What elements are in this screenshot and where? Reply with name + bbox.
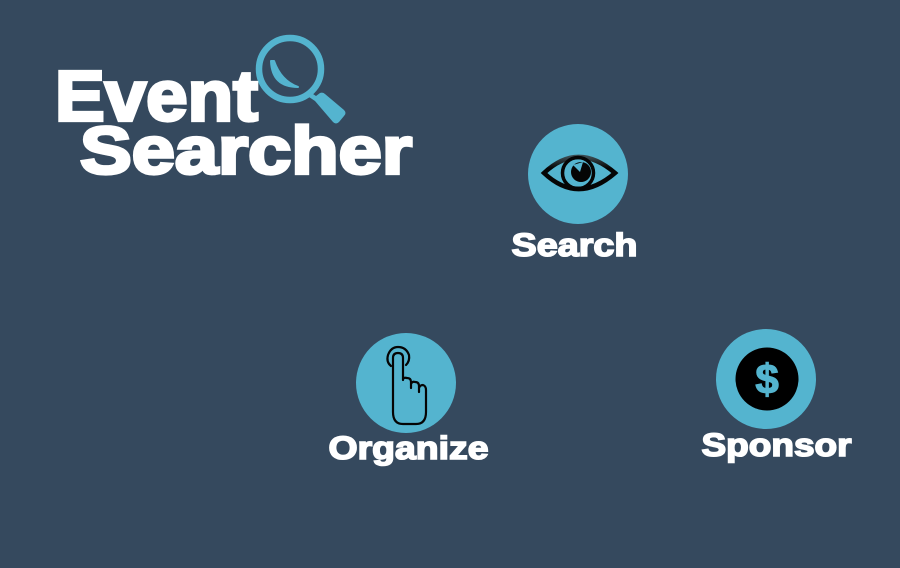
feature: Sponsor bbox=[702, 329, 852, 463]
label: Organize: Organize bbox=[328, 430, 488, 466]
label: Sponsor: Sponsor bbox=[702, 427, 852, 463]
label: Search: Search bbox=[512, 227, 638, 263]
icon: eye bbox=[528, 124, 628, 224]
feature: Organize bbox=[328, 333, 488, 466]
title: Searcher: Searcher bbox=[80, 114, 412, 188]
icon: magnifying glass bbox=[259, 38, 346, 124]
feature: Search bbox=[512, 124, 638, 263]
icon: pointing hand bbox=[356, 333, 456, 433]
icon: dollar coin: $ bbox=[755, 356, 779, 402]
title: Event: Event bbox=[55, 58, 258, 136]
icon: dollar coin bbox=[716, 329, 816, 429]
logo bbox=[55, 38, 412, 188]
